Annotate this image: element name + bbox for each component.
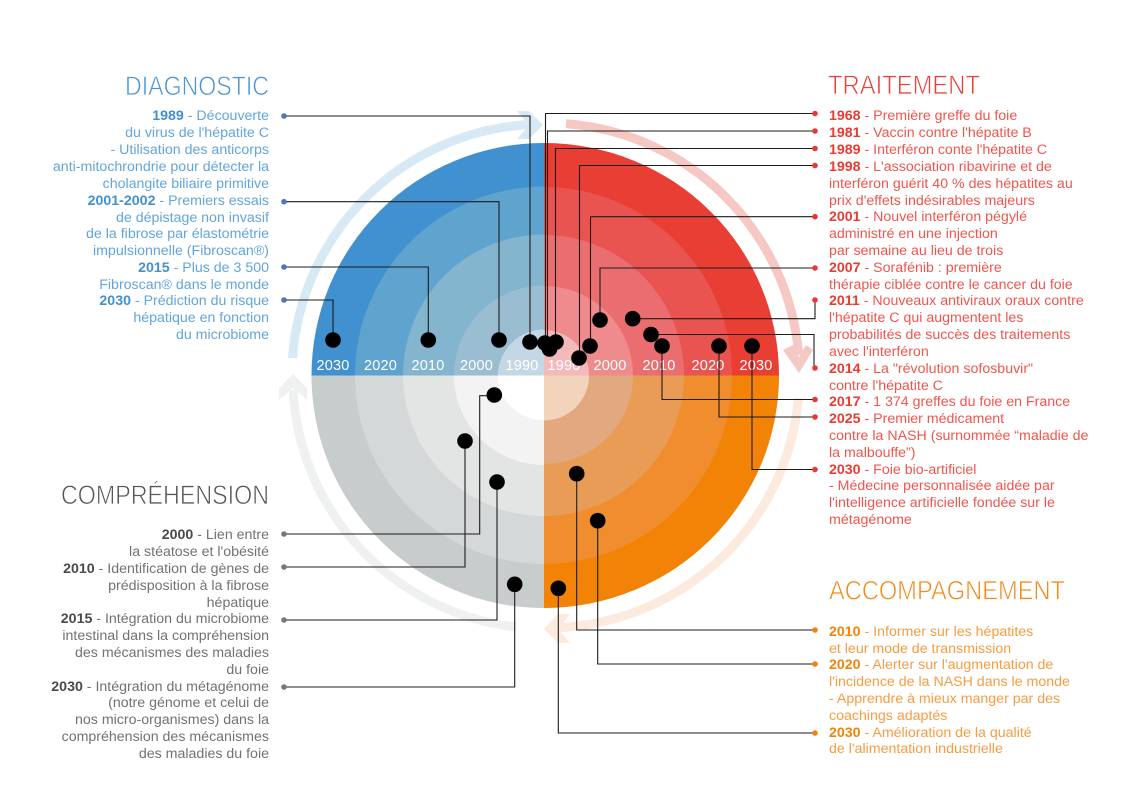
text block: compréhension: 2010 - Identification de gènes de xyxy=(63,561,269,577)
text block: diagnostic: du microbiome xyxy=(176,327,269,343)
text block: diagnostic: - Utilisation des anticorps xyxy=(110,142,269,158)
text block: compréhension: 2015 - Intégration du microbiome xyxy=(61,611,269,627)
text block: traitement: 2014 - La "révolution sofosbuvir" xyxy=(829,361,1033,377)
heading: compréhension: COMPRÉHENSION xyxy=(61,480,269,510)
text block: compréhension xyxy=(51,527,269,762)
text block: compréhension: des mécanismes des maladies xyxy=(75,645,269,661)
text block: diagnostic: impulsionnelle (Fibroscan®) xyxy=(93,243,269,259)
text block: accompagnement: et leur mode de transmission xyxy=(829,641,1011,657)
text block: traitement: avec l'interféron xyxy=(829,344,929,360)
connectors: compréhension xyxy=(281,387,522,690)
text block: traitement: la malbouffe”) xyxy=(829,445,915,461)
text block: traitement: métagénome xyxy=(829,512,912,528)
text block: traitement: 1968 - Première greffe du foie xyxy=(829,108,1017,124)
text block: compréhension: prédisposition à la fibrose xyxy=(108,578,269,594)
text block: traitement: contre la NASH (surnommée “maladie de xyxy=(829,428,1089,444)
arrow: accompagnement cycle xyxy=(544,398,798,643)
year scale labels: 2000 xyxy=(593,358,627,374)
text block: diagnostic xyxy=(53,108,269,343)
text block: diagnostic: cholangite biliaire primitive xyxy=(103,176,269,192)
heading: diagnostic: DIAGNOSTIC xyxy=(125,71,269,101)
text block: compréhension: (notre génome et celui de xyxy=(108,695,269,711)
quadrant: accompagnement xyxy=(544,376,779,608)
text block: compréhension: intestinal dans la compréhension xyxy=(62,628,269,644)
text block: traitement: l'intelligence artificielle fondée sur le xyxy=(829,495,1055,511)
text block: traitement: 2011 - Nouveaux antiviraux oraux contre xyxy=(829,293,1084,309)
connectors: traitement xyxy=(537,111,818,472)
text block: diagnostic: de dépistage non invasif xyxy=(116,210,269,226)
text block: accompagnement: 2010 - Informer sur les hépatites xyxy=(829,624,1033,640)
text block: traitement: 2001 - Nouvel interféron pégylé xyxy=(829,209,1027,225)
text block: diagnostic: 2001-2002 - Premiers essais xyxy=(88,193,269,209)
arrow: compréhension cycle xyxy=(279,374,516,627)
text block: traitement: contre l'hépatite C xyxy=(829,378,943,394)
text block: traitement: 2007 - Sorafénib : première xyxy=(829,260,1002,276)
text block: compréhension: la stéatose et l'obésité xyxy=(129,544,269,560)
text block: traitement: - Médecine personnalisée aidée par xyxy=(829,478,1055,494)
year scale labels: 2020 xyxy=(364,358,397,374)
text block: compréhension: des maladies du foie xyxy=(139,746,269,762)
year scale labels xyxy=(316,358,773,374)
text block: compréhension: du foie xyxy=(226,662,269,678)
quadrant: compréhension xyxy=(312,376,544,608)
year scale labels: 2020 xyxy=(691,358,725,374)
text block: traitement: 1998 - L'association ribavirine et de xyxy=(829,159,1052,175)
text block: traitement: probabilités de succès des traitements xyxy=(829,327,1070,343)
text block: accompagnement: - Apprendre à mieux manger par des xyxy=(829,691,1060,707)
text block: traitement xyxy=(829,108,1089,528)
text block: traitement: interféron guérit 40 % des hépatites au xyxy=(829,176,1073,192)
year scale labels: 1990 xyxy=(547,358,581,374)
heading: traitement: TRAITEMENT xyxy=(828,70,980,100)
text block: accompagnement: 2020 - Alerter sur l'augmentation de xyxy=(829,657,1053,673)
year scale labels: 2010 xyxy=(411,358,445,374)
year scale labels: 1990 xyxy=(505,358,539,374)
text block: accompagnement: l'incidence de la NASH dans le monde xyxy=(829,674,1070,690)
text block: traitement: prix d'effets indésirables majeurs xyxy=(829,193,1035,209)
text block: diagnostic: 2015 - Plus de 3 500 xyxy=(138,260,269,276)
quadrant: diagnostic xyxy=(312,143,544,376)
text block: traitement: 2030 - Foie bio-artificiel xyxy=(829,462,976,478)
text block: diagnostic: anti-mitochrondrie pour détecter la xyxy=(53,159,269,175)
text block: traitement: 1981 - Vaccin contre l'hépatite B xyxy=(829,125,1032,141)
connectors: diagnostic xyxy=(281,113,538,350)
text block: diagnostic: hépatique en fonction xyxy=(133,310,269,326)
text block: compréhension: nos micro-organismes) dans la xyxy=(75,712,269,728)
text block: traitement: thérapie ciblée contre le cancer du foie xyxy=(829,277,1073,293)
text block: diagnostic: Fibroscan® dans le monde xyxy=(99,277,269,293)
text block: compréhension: hépatique xyxy=(207,595,269,611)
text block: traitement: 1989 - Interféron conte l'hépatite C xyxy=(829,142,1047,158)
connectors: accompagnement xyxy=(550,466,818,736)
text block: compréhension: compréhension des mécanismes xyxy=(62,729,269,745)
text block: accompagnement: de l'alimentation industrielle xyxy=(829,741,1003,757)
text block: diagnostic: du virus de l'hépatite C xyxy=(125,125,269,141)
text block: diagnostic: 2030 - Prédiction du risque xyxy=(99,293,269,309)
text block: accompagnement: coachings adaptés xyxy=(829,708,947,724)
year scale labels: 2000 xyxy=(460,358,493,374)
quadrant: traitement xyxy=(544,143,779,376)
text block: traitement: l'hépatite C qui augmentent les xyxy=(829,310,1023,326)
text block: traitement: 2017 - 1 374 greffes du foie en France xyxy=(829,394,1070,410)
heading: accompagnement: ACCOMPAGNEMENT xyxy=(829,576,1065,606)
text block: accompagnement xyxy=(829,624,1070,757)
year scale labels: 2030 xyxy=(316,358,350,374)
year scale labels: 2030 xyxy=(739,358,773,374)
text block: traitement: 2025 - Premier médicament xyxy=(829,411,1004,427)
text block: accompagnement: 2030 - Amélioration de la qualité xyxy=(829,725,1032,741)
text block: compréhension: 2000 - Lien entre xyxy=(162,527,269,543)
text block: compréhension: 2030 - Intégration du métagénome xyxy=(51,679,269,695)
text block: diagnostic: 1989 - Découverte xyxy=(152,108,269,124)
text block: traitement: administré en une injection xyxy=(829,226,998,242)
year scale labels: 2010 xyxy=(642,358,676,374)
arrow: diagnostic cycle xyxy=(292,111,543,358)
arrow: traitement cycle xyxy=(566,124,813,373)
text block: diagnostic: de la fibrose par élastométrie xyxy=(86,226,269,242)
text block: traitement: par semaine au lieu de trois xyxy=(829,243,1003,259)
